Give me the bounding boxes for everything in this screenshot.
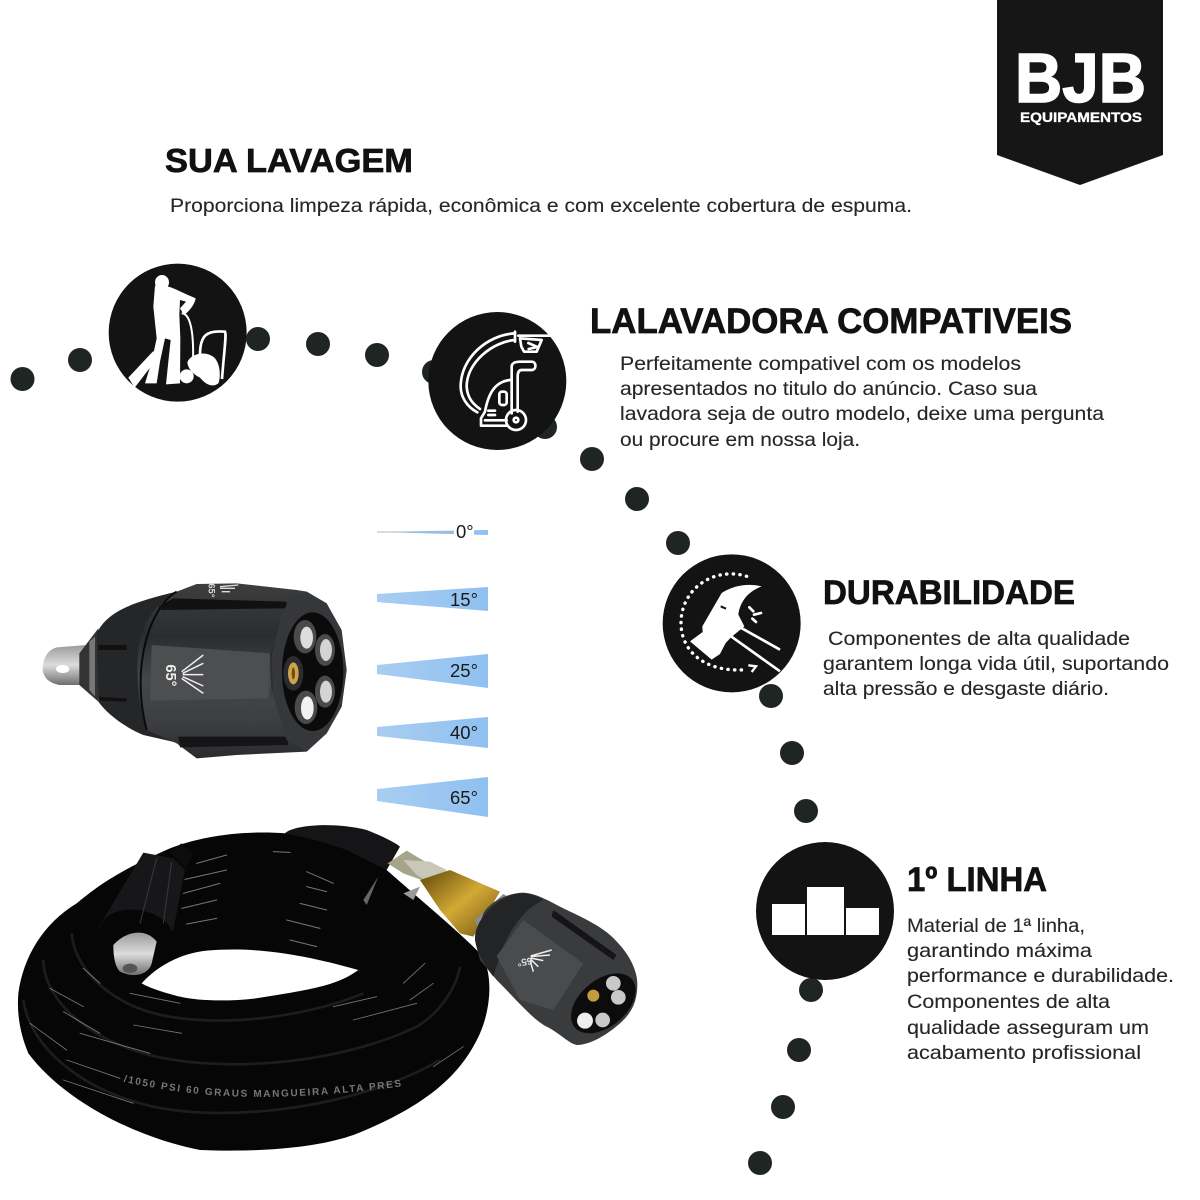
heading: Lavadora compativeis: LALAVADORA COMPATIVEIS: [590, 302, 1072, 341]
text block: first line quality: acabamento profissional: [907, 1042, 1141, 1064]
0 degree fan: [377, 521, 488, 542]
text block: durability: garantem longa vida útil, suportando: [823, 653, 1169, 675]
text block: first line quality: garantindo máxima: [907, 940, 1092, 962]
text block: first line quality: Componentes de alta: [907, 991, 1110, 1013]
15 degree fan: 15°: [450, 589, 478, 610]
subtitle text: Proporciona limpeza rápida, econômica e com excelente cobertura de espuma.: [170, 195, 912, 217]
logo: BJB Equipamentos: BJB: [1015, 39, 1146, 117]
25 degree fan: [377, 654, 488, 688]
dotted path connecting the icons: [10, 327, 823, 1175]
icon: podium: [756, 842, 894, 980]
25 degree fan: 25°: [450, 660, 478, 681]
rear hose and fittings: [285, 825, 500, 937]
40 degree fan: [377, 717, 488, 748]
large nozzle illustration: [43, 583, 347, 758]
65 degree fan: 65°: [450, 787, 478, 808]
logo: BJB Equipamentos: EQUIPAMENTOS: [1020, 110, 1142, 125]
text block: first line quality: Material de 1ª linha,: [907, 915, 1085, 937]
text block: first line quality: performance e durabilidade.: [907, 965, 1174, 987]
hose coil: /1050 PSI 60 GRAUS MANGUEIRA ALTA PRESSÃO: [124, 1074, 401, 1097]
text block: compatibility: Perfeitamente compativel com os modelos: [620, 353, 1021, 375]
text block: compatibility: [620, 353, 1104, 451]
small nozzle: [475, 893, 647, 1045]
icon: washer machine with spray gun: [428, 312, 566, 450]
hose reel with nozzle illustration: [18, 825, 638, 1151]
spray angle chart: [377, 521, 488, 817]
65 degree fan: [377, 777, 488, 817]
heading: 1º Linha: 1º LINHA: [907, 861, 1047, 899]
icon: hammer: [663, 554, 801, 692]
15 degree fan: [377, 587, 488, 611]
text block: durability: alta pressão e desgaste diário.: [823, 678, 1109, 700]
heading: Durabilidade: DURABILIDADE: [823, 574, 1075, 612]
0 degree fan: 0°: [456, 521, 474, 542]
logo: BJB Equipamentos: [997, 0, 1163, 185]
hose gun grip: [96, 843, 193, 975]
text block: durability: Componentes de alta qualidade: [828, 628, 1130, 650]
small nozzle: 65°: [516, 954, 533, 968]
40 degree fan: 40°: [450, 722, 478, 743]
title: Sua Lavagem: SUA LAVAGEM: [165, 142, 413, 179]
hose coil: [18, 832, 490, 1151]
text block: compatibility: ou procure em nossa loja.: [620, 429, 860, 451]
icon: worker with pressure washer: [109, 264, 247, 402]
large nozzle illustration: 65°: [206, 583, 216, 598]
text block: compatibility: apresentados no titulo do anúncio. Caso sua: [620, 378, 1037, 400]
text block: first line quality: [907, 915, 1174, 1064]
large nozzle illustration: 65°: [162, 664, 178, 687]
text block: compatibility: lavadora seja de outro modelo, deixe uma pergunta: [620, 403, 1104, 425]
text block: durability: [823, 628, 1169, 700]
text block: first line quality: qualidade asseguram um: [907, 1017, 1149, 1039]
